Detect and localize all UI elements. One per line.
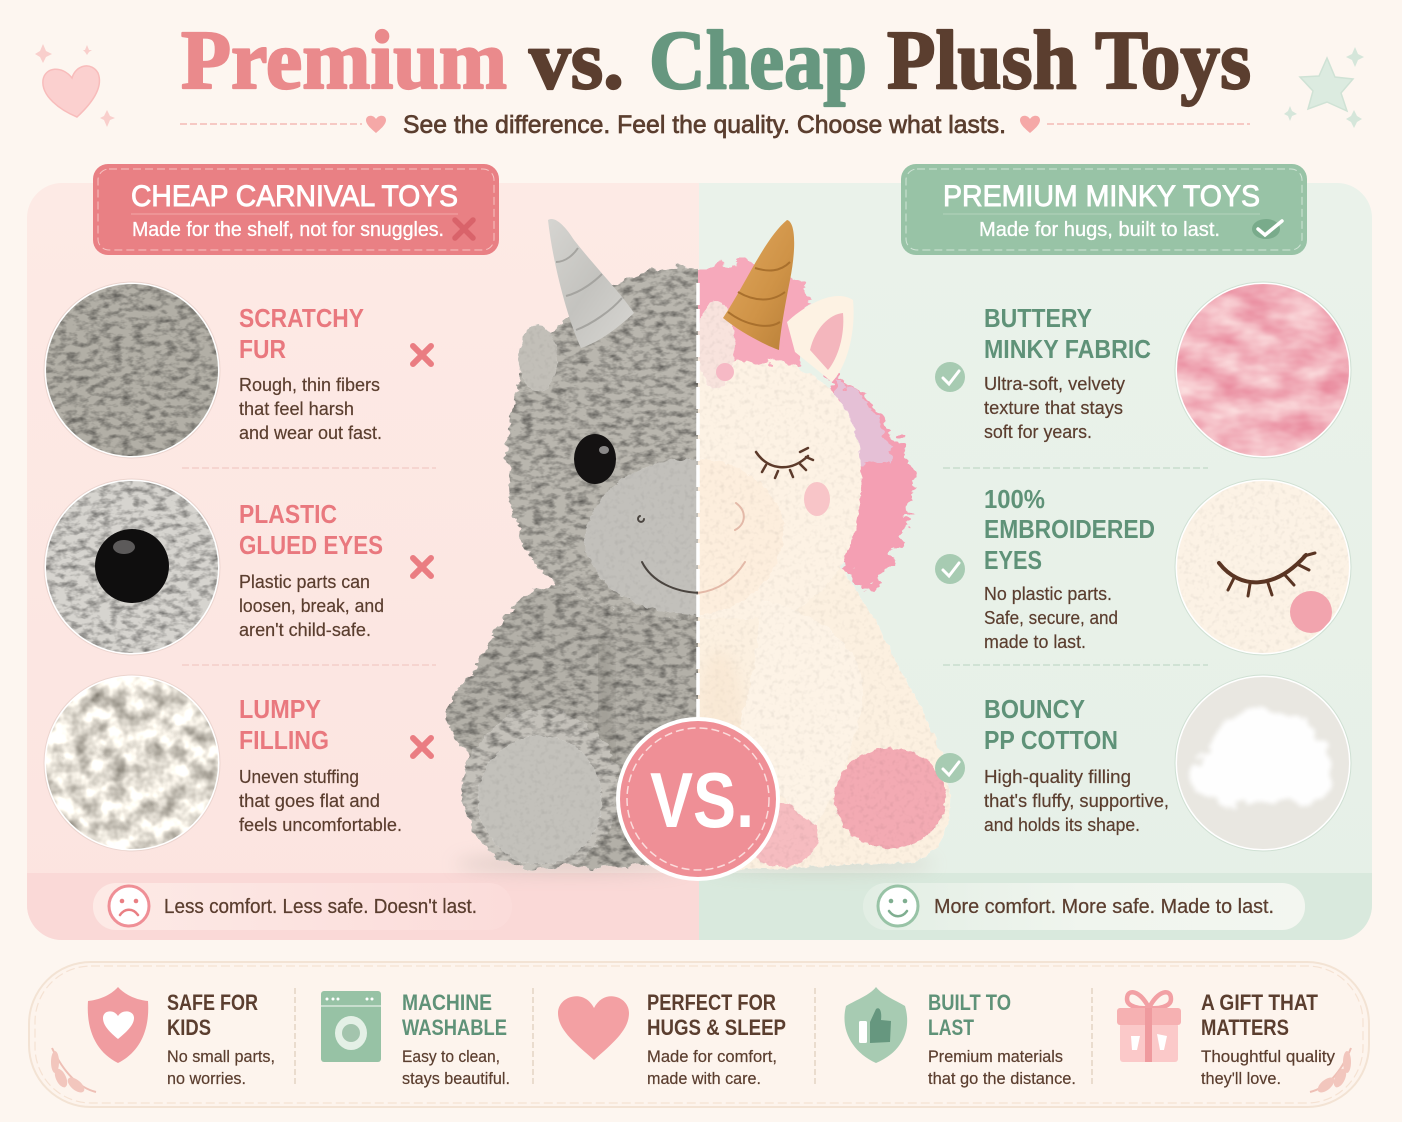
- pink foot right: [834, 748, 946, 848]
- icon: happy face: [878, 886, 918, 926]
- icon: x mark: [413, 558, 431, 576]
- text: plastic glued eyes: Plastic parts can: [239, 571, 370, 592]
- texture circle: buttery minky fabric: [1174, 282, 1352, 458]
- grey foot: [463, 710, 619, 870]
- texture circle: bouncy cotton: [1174, 674, 1352, 852]
- text: bouncy pp cotton: and holds its shape.: [984, 814, 1140, 835]
- heading badge: cheap carnival toys: [93, 164, 499, 255]
- text: scratchy fur: and wear out fast.: [239, 422, 382, 443]
- heading badge: cheap carnival toys: CHEAP CARNIVAL TOYS: [131, 180, 458, 213]
- icon: gift box: [1117, 992, 1181, 1062]
- text: lumpy filling: [239, 694, 402, 835]
- text: machine washable: MACHINE: [402, 990, 492, 1015]
- text: perfect for hugs and sleep: [647, 990, 786, 1088]
- text: a gift that matters: A GIFT THAT: [1201, 990, 1318, 1015]
- texture circle: lumpy filling: [44, 674, 220, 852]
- text: lumpy filling: feels uncomfortable.: [239, 814, 402, 835]
- pink cheek: [804, 482, 830, 516]
- grey body crease shading: [602, 640, 612, 770]
- text: a gift that matters: Thoughtful quality: [1201, 1048, 1336, 1066]
- text: lumpy filling: that goes flat and: [239, 790, 380, 811]
- silver horn: [548, 219, 634, 348]
- text: lumpy filling: LUMPY: [239, 694, 321, 724]
- text: embroidered eyes: EYES: [984, 545, 1042, 575]
- text: safe for kids: No small parts,: [167, 1048, 275, 1066]
- text: perfect for hugs and sleep: made with care.: [647, 1070, 761, 1088]
- subtitle with hearts: See the difference. Feel the quality. Choose what lasts.: [403, 111, 1006, 139]
- pink forelock: [733, 354, 774, 367]
- icon: shield with thumbs up: [844, 987, 907, 1063]
- illustration: cream premium unicorn plush: [690, 220, 950, 873]
- icon: check: [935, 753, 965, 783]
- text: safe for kids: [167, 990, 275, 1088]
- cream muzzle: [690, 459, 784, 616]
- decoration: heart and sparkles: [35, 44, 115, 127]
- body shading near the arm: [700, 659, 740, 727]
- plastic eye: [574, 434, 616, 484]
- text: buttery minky fabric: texture that stays: [984, 397, 1123, 418]
- text: scratchy fur: that feel harsh: [239, 398, 354, 419]
- text: plastic glued eyes: [239, 499, 384, 640]
- icon: check: [935, 362, 965, 392]
- summary pill: premium: [863, 883, 1305, 930]
- text: built to last: BUILT TO: [928, 990, 1011, 1015]
- cream head: [690, 354, 861, 619]
- texture circle: embroidered eye: [1174, 478, 1352, 656]
- nose and smile: [638, 516, 700, 593]
- decoration: right leaf sprig: [1310, 1048, 1351, 1095]
- icon: x mark: [413, 346, 431, 364]
- text: embroidered eyes: EMBROIDERED: [984, 514, 1155, 544]
- text: a gift that matters: they'll love.: [1201, 1070, 1281, 1088]
- heading badge: premium minky toys: Made for hugs, built to last.: [979, 219, 1220, 241]
- text: buttery minky fabric: soft for years.: [984, 421, 1092, 442]
- illustration: grey cheap unicorn plush: [448, 219, 705, 873]
- text: buttery minky fabric: Ultra-soft, velvety: [984, 373, 1126, 394]
- text: buttery minky fabric: [984, 303, 1151, 442]
- text: embroidered eyes: Safe, secure, and: [984, 607, 1118, 628]
- cream arm: [740, 600, 863, 825]
- summary pill: cheap: [93, 883, 512, 930]
- icon: washing machine: [321, 991, 381, 1062]
- heading badge: premium minky toys: PREMIUM MINKY TOYS: [943, 180, 1260, 213]
- decoration: star and sparkles: [1284, 47, 1364, 128]
- text: buttery minky fabric: MINKY FABRIC: [984, 334, 1151, 364]
- text: lumpy filling: Uneven stuffing: [239, 766, 359, 787]
- cream ear: [787, 296, 854, 382]
- text: safe for kids: SAFE FOR: [167, 990, 258, 1015]
- text: buttery minky fabric: BUTTERY: [984, 303, 1092, 333]
- text: bouncy pp cotton: High-quality filling: [984, 766, 1131, 787]
- texture circle: scratchy fur: [44, 282, 220, 458]
- text: embroidered eyes: 100%: [984, 484, 1045, 514]
- text: bouncy pp cotton: PP COTTON: [984, 725, 1118, 755]
- text: bouncy pp cotton: BOUNCY: [984, 694, 1085, 724]
- icon: sad face: [109, 886, 149, 926]
- summary pill: cheap: Less comfort. Less safe. Doesn't last.: [164, 896, 477, 918]
- text: lumpy filling: FILLING: [239, 725, 329, 755]
- title: [181, 14, 1251, 107]
- text: perfect for hugs and sleep: PERFECT FOR: [647, 990, 776, 1015]
- icon: safety shield: [88, 987, 148, 1063]
- text: scratchy fur: SCRATCHY: [239, 303, 364, 333]
- fabric flower: [697, 301, 735, 389]
- decoration: left leaf sprig: [51, 1048, 96, 1095]
- panel: cheap side background: [27, 183, 699, 940]
- title: Premium: [181, 14, 507, 107]
- text: perfect for hugs and sleep: HUGS & SLEEP: [647, 1015, 786, 1040]
- text: scratchy fur: [239, 303, 382, 443]
- text: embroidered eyes: No plastic parts.: [984, 583, 1112, 604]
- text: embroidered eyes: made to last.: [984, 631, 1086, 652]
- subtitle with hearts: [180, 111, 1250, 139]
- icon: heart: [558, 996, 629, 1060]
- text: scratchy fur: FUR: [239, 334, 286, 364]
- text: plastic glued eyes: GLUED EYES: [239, 530, 383, 560]
- text: built to last: LAST: [928, 1015, 974, 1040]
- text: machine washable: Easy to clean,: [402, 1048, 500, 1066]
- text: machine washable: stays beautiful.: [402, 1070, 510, 1088]
- cream body: [690, 566, 950, 872]
- text: bouncy pp cotton: [984, 694, 1169, 835]
- text: bouncy pp cotton: that's fluffy, supportive,: [984, 790, 1169, 811]
- text: plastic glued eyes: loosen, break, and: [239, 595, 384, 616]
- grey ear: [519, 325, 557, 391]
- text: built to last: that go the distance.: [928, 1070, 1076, 1088]
- texture circle: plastic glued eye: [44, 478, 220, 656]
- title: Cheap: [649, 14, 867, 107]
- pink foot left: [756, 803, 819, 868]
- text: plastic glued eyes: aren't child-safe.: [239, 619, 371, 640]
- text: a gift that matters: MATTERS: [1201, 1015, 1289, 1040]
- rainbow mane: [690, 262, 915, 590]
- centre divider line: [696, 283, 700, 725]
- grey body and arm: [448, 581, 705, 868]
- heading badge: premium minky toys: [901, 164, 1307, 255]
- title: vs.: [529, 14, 624, 107]
- text: built to last: [928, 990, 1076, 1088]
- grey head: [506, 266, 705, 618]
- text: plastic glued eyes: PLASTIC: [239, 499, 337, 529]
- bottom benefits strip: [29, 962, 1369, 1107]
- VS badge: [618, 719, 778, 879]
- heading badge: cheap carnival toys: Made for the shelf, not for snuggles.: [132, 219, 444, 241]
- VS badge: VS.: [650, 756, 754, 844]
- title: Plush Toys: [887, 14, 1251, 107]
- text: safe for kids: KIDS: [167, 1015, 211, 1040]
- icon: check: [935, 554, 965, 584]
- summary pill: premium: More comfort. More safe. Made to last.: [934, 896, 1274, 918]
- text: perfect for hugs and sleep: Made for comfort,: [647, 1048, 777, 1066]
- text: machine washable: WASHABLE: [402, 1015, 507, 1040]
- text: scratchy fur: Rough, thin fibers: [239, 374, 380, 395]
- text: safe for kids: no worries.: [167, 1070, 246, 1088]
- panel: premium side background: [699, 183, 1372, 940]
- icon: x mark: [413, 738, 431, 756]
- text: machine washable: [402, 990, 510, 1088]
- grey muzzle: [585, 459, 705, 615]
- text: a gift that matters: [1201, 990, 1336, 1088]
- text: embroidered eyes: [984, 484, 1155, 652]
- embroidered closed eye: [756, 448, 813, 478]
- gold horn: [723, 220, 794, 350]
- text: built to last: Premium materials: [928, 1048, 1063, 1066]
- nose and smile: [698, 503, 745, 593]
